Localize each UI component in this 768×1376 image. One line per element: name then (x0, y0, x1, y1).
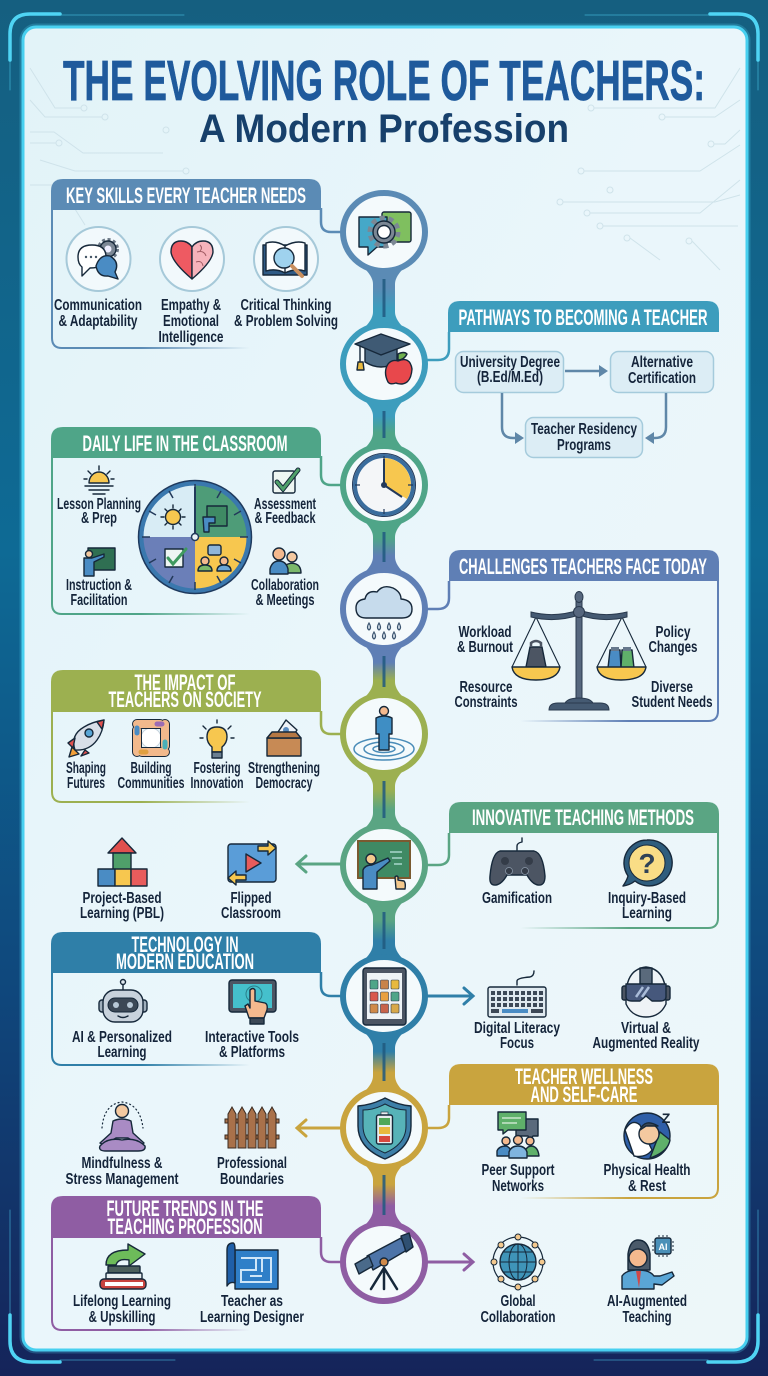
labels: technology (72, 1020, 700, 1061)
labels: key skills: Emotional (163, 313, 219, 330)
labels: key skills: Communication (54, 297, 142, 314)
box: teacher residency: Teacher Residency (531, 421, 637, 438)
labels: daily life: Lesson Planning (57, 496, 141, 513)
icon: AI teacher (622, 1236, 674, 1289)
panel: key skills (51, 179, 342, 348)
icon: meditation (100, 1102, 145, 1151)
icon: book and magnifier (254, 227, 318, 291)
labels: future trends: AI-Augmented (607, 1293, 687, 1310)
arrow: to right (427, 988, 473, 1004)
labels: wellness: Peer Support (482, 1162, 555, 1179)
labels: impact (66, 760, 320, 792)
labels: daily life (57, 496, 319, 609)
labels: key skills: Intelligence (158, 329, 224, 346)
labels: key skills: Critical Thinking (240, 297, 332, 314)
icon: collaboration people (270, 548, 301, 574)
panel: impact on society: TEACHERS ON SOCIETY (108, 687, 262, 712)
box: university degree: (B.Ed/M.Ed) (477, 369, 543, 386)
labels: key skills: & Problem Solving (234, 313, 338, 330)
icon: heart brain (160, 227, 224, 291)
box: teacher residency: Programs (557, 437, 611, 454)
timeline node: skills (343, 193, 425, 271)
icon: communication (66, 227, 130, 291)
labels: future trends: Learning Designer (200, 1309, 304, 1326)
labels: wellness: Stress Management (66, 1171, 179, 1188)
labels: technology: Focus (500, 1035, 534, 1052)
labels: challenges: Policy (656, 624, 691, 641)
icon: instruction (84, 548, 115, 576)
labels: wellness: Mindfulness & (82, 1155, 163, 1172)
panel: innovative methods (80, 802, 719, 928)
labels: future trends: Teacher as (221, 1293, 283, 1310)
arrows: pathway flow (502, 365, 666, 444)
icon: gamepad (490, 838, 545, 885)
timeline node: teacher at board (343, 826, 425, 904)
icon: light bulb (200, 720, 234, 758)
timeline node: tablet (343, 957, 425, 1035)
title (63, 49, 705, 151)
timeline node: telescope (343, 1223, 425, 1301)
panel: daily life: DAILY LIFE IN THE CLASSROOM (82, 431, 288, 456)
labels: impact: Innovation (190, 775, 244, 792)
labels: wellness: Networks (492, 1178, 544, 1195)
icon: sunrise (84, 466, 114, 494)
labels: impact: Shaping (66, 760, 106, 777)
labels: future trends: Lifelong Learning (73, 1293, 171, 1310)
labels: innovative: Flipped (230, 890, 272, 907)
labels: innovative: Classroom (221, 905, 281, 922)
labels: challenges: Diverse (651, 679, 693, 696)
panel: wellness (66, 1064, 719, 1198)
arrow: to left (297, 1120, 341, 1136)
icon: joined hands (137, 724, 165, 752)
icon: flipped classroom (228, 841, 276, 885)
labels: wellness (66, 1155, 690, 1195)
labels: daily life: & Feedback (254, 510, 316, 527)
labels: technology: Digital Literacy (474, 1020, 560, 1037)
icon: sleep: Z (662, 1110, 671, 1126)
panel: wellness: TEACHER WELLNESS (515, 1064, 653, 1089)
labels: impact: Democracy (256, 775, 313, 792)
labels: technology: AI & Personalized (72, 1029, 172, 1046)
icon: checklist (273, 470, 298, 493)
box: alternative certification: Alternative (631, 354, 693, 371)
icon: books with arrow (100, 1244, 146, 1289)
labels: wellness: Physical Health (604, 1162, 690, 1179)
title: A Modern Profession (199, 107, 569, 151)
panel: future trends (51, 1196, 687, 1330)
labels: innovative: Learning (PBL) (80, 905, 164, 922)
timeline node: graduation (343, 325, 425, 403)
arrow: to left (297, 856, 341, 872)
icon: robot (99, 980, 147, 1022)
labels: challenges (454, 624, 713, 711)
labels: key skills: Empathy & (161, 297, 221, 314)
panel: future trends: FUTURE TRENDS IN THE (106, 1196, 264, 1221)
labels: impact: Building (130, 760, 172, 777)
icon: VR headset (622, 967, 670, 1017)
labels: daily life: Collaboration (251, 577, 319, 594)
arrow: to right (427, 1254, 473, 1270)
labels: future trends: Teaching (622, 1309, 672, 1326)
labels: challenges: Changes (648, 639, 698, 656)
timeline node: storm cloud (343, 570, 425, 648)
panel: key skills: KEY SKILLS EVERY TEACHER NEEDS (66, 183, 306, 208)
icon: AI teacher: AI (658, 1242, 668, 1252)
labels: challenges: Student Needs (632, 694, 713, 711)
icon: stacking blocks (98, 838, 147, 886)
panel: impact on society: THE IMPACT OF (134, 670, 236, 695)
labels: impact: Futures (67, 775, 105, 792)
labels: innovative: Inquiry-Based (608, 890, 686, 907)
icon: rocket (68, 720, 104, 757)
panel: technology: TECHNOLOGY IN (132, 932, 238, 957)
icon: fence (225, 1107, 279, 1148)
panel: pathways (426, 301, 719, 458)
box: teacher residency (526, 418, 642, 458)
labels: technology: Augmented Reality (592, 1035, 700, 1052)
labels: daily life: & Prep (81, 510, 117, 527)
timeline node: shield battery (343, 1089, 425, 1167)
icon: touch screen (229, 980, 276, 1024)
box: alternative certification: Certification (628, 370, 696, 387)
labels: challenges: Resource (460, 679, 513, 696)
labels: key skills (54, 297, 338, 346)
icon: globe network (491, 1234, 545, 1290)
labels: daily life: Instruction & (66, 577, 132, 594)
chart: day clock wheel (138, 480, 252, 594)
labels: impact: Fostering (194, 760, 240, 777)
labels: future trends: & Upskilling (88, 1309, 156, 1326)
panel: technology: MODERN EDUCATION (116, 949, 254, 974)
labels: challenges: Workload (458, 624, 512, 641)
icon: balance scale (512, 592, 646, 710)
panel: daily life (51, 427, 342, 614)
icon: question bubble: ? (638, 848, 656, 879)
labels: wellness: Boundaries (220, 1171, 284, 1188)
icon: blueprint (227, 1243, 278, 1289)
box: university degree (456, 352, 564, 392)
panel: impact on society (51, 670, 342, 802)
labels: wellness: & Rest (628, 1178, 666, 1195)
timeline node: ripple person (343, 695, 425, 773)
labels: wellness: Professional (217, 1155, 287, 1172)
labels: impact: Communities (118, 775, 185, 792)
labels: key skills: & Adaptability (58, 313, 138, 330)
labels: innovative: Learning (622, 905, 672, 922)
icon: sleep (624, 1110, 671, 1159)
labels: technology: Interactive Tools (205, 1029, 299, 1046)
circuit pattern (30, 68, 740, 270)
labels: impact: Strengthening (248, 760, 320, 777)
labels: innovative: Gamification (482, 890, 552, 907)
labels: future trends: Collaboration (480, 1309, 556, 1326)
labels: technology: Virtual & (621, 1020, 671, 1037)
panel: technology (51, 932, 700, 1065)
icon: ballot box (267, 720, 301, 756)
timeline node: clock (343, 446, 425, 524)
labels: innovative (80, 890, 686, 922)
labels: technology: Learning (98, 1044, 146, 1061)
icon: question bubble (623, 840, 672, 886)
labels: daily life: Facilitation (70, 592, 128, 609)
labels: future trends: Global (500, 1293, 536, 1310)
box: alternative certification (610, 352, 714, 392)
labels: daily life: Assessment (254, 496, 316, 513)
labels: technology: & Platforms (219, 1044, 285, 1061)
labels: daily life: & Meetings (256, 592, 315, 609)
panel: future trends: TEACHING PROFESSION (108, 1214, 262, 1239)
box: university degree: University Degree (460, 354, 560, 371)
timeline connectors (362, 266, 406, 1228)
labels: future trends (73, 1293, 687, 1326)
icon: keyboard (488, 971, 546, 1017)
panel: wellness: AND SELF-CARE (530, 1082, 638, 1107)
labels: challenges: Constraints (454, 694, 518, 711)
labels: innovative: Project-Based (82, 890, 162, 907)
panel: challenges (426, 550, 719, 721)
icon: peer support (497, 1112, 539, 1158)
labels: challenges: & Burnout (457, 639, 513, 656)
